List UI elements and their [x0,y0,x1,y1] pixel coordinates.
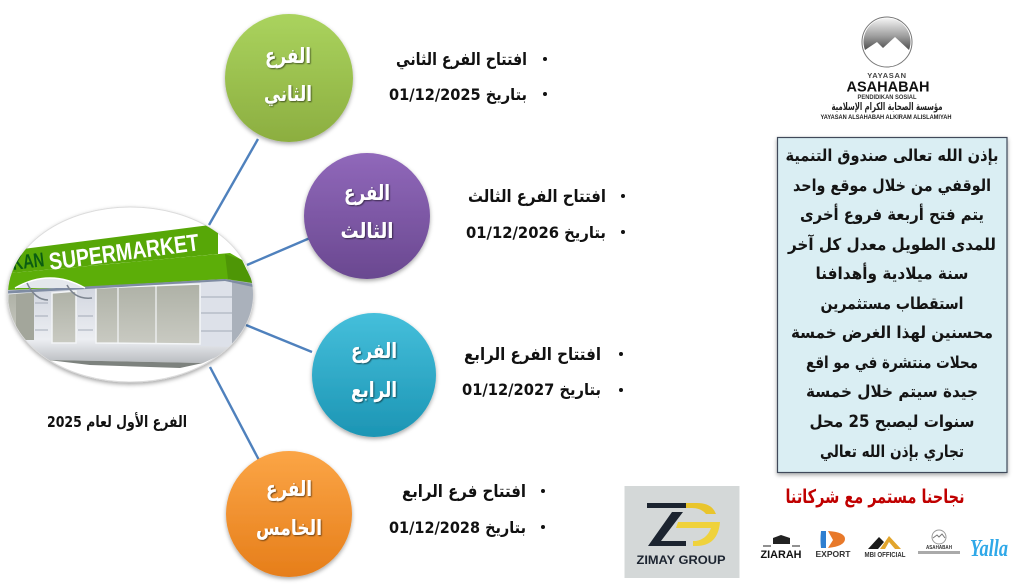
panel: description text box: سنة ميلادية وأهدافنا [816,263,968,284]
logo: Asahabah small: ASAHABAH [926,545,952,551]
sign text: KAN [11,249,45,275]
branch 5 details: بتاريخ 01/12/2028 [389,518,526,537]
branch 3 details: بتاريخ 01/12/2026 [466,223,606,242]
logo: Yalla: Yalla [970,536,1008,562]
logo: MBI Official: MBI OFFICIAL [864,552,906,559]
panel: description text box: يتم فتح أربعة فروع أخرى [800,204,984,225]
logo: Ziarah: ZIARAH [760,549,802,561]
branch 5 circle: الفرع [266,477,312,501]
branch 4 circle: الرابع [351,378,397,402]
logo: Yayasan Asahabah: PENDIDIKAN SOSIAL [858,95,917,101]
branch 3 circle [304,153,430,279]
caption: first branch: الفرع الأول لعام 2025 [47,412,187,431]
panel: description text box [778,138,1007,472]
supermarket photo [0,207,253,382]
logo: Yayasan Asahabah [820,17,952,121]
branch 3 details: افتتاح الفرع الثالث [468,187,606,207]
panel: description text box: سنوات ليصبح 25 محل [810,412,974,432]
branch 3 circle: الفرع [344,181,390,205]
logo: Zimay Group: ZIMAY GROUP [636,555,726,567]
branch 2 circle: الثاني [264,82,312,106]
branch 3 details [466,187,625,242]
branch 2 circle [225,14,353,142]
logo: MBI Official [864,536,906,559]
branch 4 details [462,345,623,399]
panel: description text box: بإذن الله تعالى صندوق التنمية [786,146,998,166]
branch 4 circle [312,313,436,437]
heading: partners: نجاحنا مستمر مع شركاتنا [786,486,964,508]
branch 5 circle: الخامس [256,516,322,540]
branch 5 details [389,482,545,537]
logo: Export [816,531,851,559]
panel: description text box: جيدة سيتم خلال خمسة [806,382,978,401]
branch 4 circle: الفرع [351,339,397,363]
logo: Yayasan Asahabah: YAYASAN [867,71,907,80]
branch 2 details [389,50,547,104]
panel: description text box: محسنين لهذا الغرض خمسة [791,323,993,343]
logo: Zimay Group [624,486,740,578]
branch 2 details: افتتاح الفرع الثاني [396,50,527,70]
branch 4 details: بتاريخ 01/12/2027 [462,380,601,399]
panel: description text box: الوقفي من خلال موقع واحد [793,176,991,196]
logo: Export: EXPORT [816,549,851,559]
branch 5 details: افتتاح فرع الرابع [402,482,526,502]
panel: description text box: استقطاب مستثمرين [820,294,964,314]
branch 2 circle: الفرع [265,44,311,68]
logo: Yayasan Asahabah: ASAHABAH [846,80,930,96]
canopy arc [15,278,85,288]
green awning [0,253,253,290]
logo: Yayasan Asahabah: YAYASAN ALSAHABAH ALKIRAM ALISLAMIYAH [820,115,952,121]
panel: description text box: محلات منتشرة في مو اقع [806,353,978,373]
green sign [0,225,218,274]
supermarket photo: SUPERMARKET [47,229,201,276]
logo: Asahabah small [918,530,960,554]
connector lines [209,139,312,462]
logo: Yayasan Asahabah: مؤسسة الصحابة الكرام الإسلامية [832,101,942,113]
branch 2 details: بتاريخ 01/12/2025 [389,85,527,104]
panel: description text box: تجاري بإذن الله تعالي [820,442,964,462]
branch 4 details: افتتاح الفرع الرابع [464,345,601,365]
branch 5 circle [226,451,352,577]
logo: Ziarah [760,535,802,561]
panel: description text box: للمدى الطويل معدل كل آخر [787,233,996,255]
branch 3 circle: الثالث [340,219,394,243]
